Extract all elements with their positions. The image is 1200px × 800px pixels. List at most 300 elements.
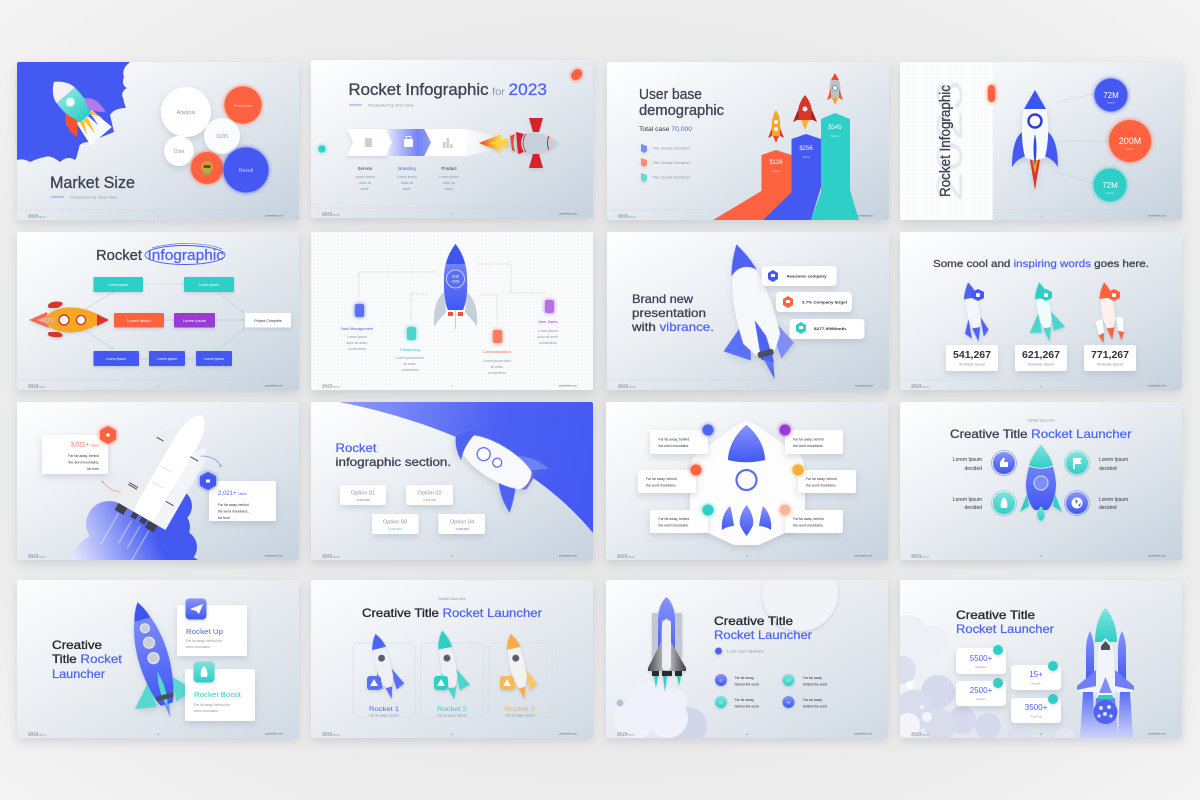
box: orange: Lorem Ipsum <box>127 318 151 323</box>
footer: 2023 <box>618 384 629 388</box>
subtitle: Subtitle Goes Here <box>439 597 466 601</box>
icon: blue rocket <box>107 594 199 726</box>
dashed connectors <box>359 264 546 324</box>
item: positioning <box>396 327 425 372</box>
chevron: service <box>347 129 392 156</box>
panel: shuttle slide <box>17 400 299 569</box>
bubble: result: Result <box>239 168 254 174</box>
legend <box>641 144 690 182</box>
icon: blue hex <box>200 472 216 490</box>
footer <box>617 554 872 558</box>
label: product <box>439 166 459 191</box>
panel: brand new presentation slide <box>607 232 889 390</box>
stat card three: Worldwide Spread <box>1097 362 1123 366</box>
box: blue two: Lorem Ipsum <box>157 357 177 361</box>
option: rocket 1: Rocket 1 <box>369 706 399 713</box>
card: rocket boost <box>185 669 255 721</box>
label: branding: Branding <box>398 166 416 171</box>
panel: inspiring words slide <box>900 232 1182 390</box>
stat: 72M blue <box>1094 78 1128 112</box>
stat card: fuel: Fuel Full <box>1030 714 1042 718</box>
feature: top left: decided <box>964 466 982 472</box>
feature: top left <box>953 450 1016 476</box>
footer: 2023 <box>618 214 629 218</box>
card: 3,021 users: the word mountains, <box>68 460 99 464</box>
item 04: 04 <box>787 700 790 704</box>
icon: goal rocket: Goal <box>452 274 459 278</box>
card: 2,021 users: 2,021+ Users <box>218 491 247 497</box>
card: option 04: 4,316,000 <box>455 527 469 531</box>
stat card: machine: 5500+ <box>970 654 993 663</box>
box: purple <box>174 313 215 328</box>
footer brand: 2023 <box>617 732 628 736</box>
item 02 <box>782 674 827 686</box>
panel: user base slide <box>607 62 889 220</box>
pill: orange <box>569 67 584 82</box>
heading <box>631 292 714 334</box>
box: teal top right <box>184 277 234 292</box>
feature: bottom left: Lorem Ipsum <box>953 497 982 503</box>
stat: 72M teal: Income <box>1106 192 1115 195</box>
label: product: Product <box>441 166 457 171</box>
bar: orange arrow: $126 <box>769 160 783 166</box>
item 01: behind the word <box>735 682 759 686</box>
heading: Title Rocket <box>52 652 123 666</box>
bar: orange arrow <box>713 150 792 220</box>
item 04: behind the word <box>803 704 827 708</box>
footer: yourwebsite.com <box>265 214 283 218</box>
label: service: Lorem ipsum <box>355 175 375 179</box>
card: option 03: 3,316,000 <box>388 527 402 531</box>
option: rocket 2 <box>421 627 483 718</box>
label: product: Lorem ipsum <box>439 175 459 179</box>
item 02: 02 <box>787 678 790 682</box>
icon: teal rocket <box>1021 279 1067 345</box>
item: task management: consectetur <box>348 347 367 351</box>
card: option 01: 3,316,000 <box>356 498 370 502</box>
heading: Rocket Launcher <box>714 628 812 642</box>
card: company target <box>776 292 852 312</box>
footer <box>311 208 577 216</box>
icon: white rocket <box>1012 90 1058 190</box>
label: service <box>355 166 375 191</box>
callout: middle left: the word mountains. <box>646 484 677 488</box>
box: blue one: Lorem Ipsum <box>106 357 126 361</box>
item: item sales: Item Sales <box>539 319 557 324</box>
footer: 2023 <box>617 554 628 558</box>
footer <box>322 732 577 736</box>
option: rocket 3 <box>489 630 552 718</box>
heading: Rocket <box>336 441 377 455</box>
icon: white rocket <box>437 417 549 518</box>
footer brand: vibrance <box>628 734 636 736</box>
card: rocket up: word mountains. <box>186 645 211 649</box>
feature: top left: Lorem Ipsum <box>953 457 982 463</box>
icon: plane tile <box>186 598 206 620</box>
heading: demographic <box>639 102 724 119</box>
label: product: dolor sit <box>443 181 455 185</box>
item: positioning: Lorem ipsum dolor <box>396 356 425 360</box>
footer <box>28 554 283 558</box>
stat: 72M blue: Income <box>1107 102 1116 104</box>
icon: goal rocket <box>434 244 477 329</box>
footer <box>900 380 1182 388</box>
panel: rocket infographic slide <box>311 60 593 218</box>
legend: The Great Decision <box>652 176 690 180</box>
card: option 04: Option 04 <box>450 520 474 526</box>
card: monthly value: $277,99/Month <box>814 327 846 331</box>
option: rocket 3: Far far away, behind <box>506 714 535 718</box>
item 03: behind the word <box>735 704 759 708</box>
heading: Rocket Launcher <box>956 622 1054 636</box>
callout: bottom left: Far far away, behind <box>658 517 689 521</box>
stat: 72M blue: 72M <box>1103 91 1119 100</box>
card: awesome company <box>762 266 837 286</box>
legend: The Great Decision <box>652 161 690 165</box>
heading year: 2023 <box>508 80 547 99</box>
heading: infographic section. <box>336 455 451 469</box>
stat card: rocket <box>956 678 1006 706</box>
stat card two <box>1015 345 1067 371</box>
footer: vibrance <box>628 216 637 218</box>
stat card: people <box>1011 661 1061 690</box>
card: option 01 <box>340 485 386 505</box>
launch clouds <box>888 615 1075 750</box>
heading suffix: for <box>492 87 506 98</box>
footer: yourwebsite.com <box>855 214 873 218</box>
footer: yourwebsite.com <box>559 554 577 558</box>
footer: vibrance <box>628 556 636 558</box>
footer: vibrance <box>332 386 341 388</box>
icon: red rocket <box>479 118 558 168</box>
footer: 2023 <box>322 732 333 736</box>
panel: flowchart slide <box>17 232 299 390</box>
footer: yourwebsite.com <box>265 384 283 388</box>
blue sky with clouds <box>17 62 130 162</box>
item 03: 03 <box>719 700 723 704</box>
callout: middle left: Far far away, behind <box>646 477 677 481</box>
feature: bottom right <box>1064 490 1128 516</box>
panel: launch pad slide <box>606 555 888 745</box>
footer: 10 <box>451 556 454 558</box>
item: communication: Lorem ipsum dolor <box>483 359 512 363</box>
pill: orange <box>988 85 995 102</box>
heading: Infographic <box>148 247 225 264</box>
icon: orange hex <box>100 426 116 444</box>
panel: rocket section slide <box>311 402 593 560</box>
feature: top right: Lorem Ipsum <box>1099 457 1128 463</box>
footer: 2023 <box>911 384 922 388</box>
label: service: amet. <box>361 187 369 191</box>
panel: three rockets slide <box>311 580 593 738</box>
item 03: Far far away, <box>735 698 754 702</box>
bar: teal arrow: Income <box>831 135 840 138</box>
item: communication <box>483 330 512 375</box>
item: communication: sit amet, <box>491 365 503 369</box>
item: positioning: Positioning <box>400 347 420 352</box>
callout: top right <box>780 424 843 454</box>
stat card one: 541,267 <box>953 350 991 361</box>
box: teal top left: Lorem Ipsum <box>108 283 128 287</box>
icon: blue rocket <box>956 280 990 344</box>
stat card three: 771,267 <box>1091 350 1129 361</box>
footer <box>1040 732 1166 736</box>
footer: 5 <box>157 386 159 388</box>
card: rocket up: Far far away, behind the <box>186 639 222 643</box>
bubble: date: 11/05 <box>216 134 228 140</box>
footer: 2023 <box>322 384 333 388</box>
stat card two: Worldwide Spread <box>1028 362 1054 366</box>
feature: bottom left: decided <box>964 505 982 511</box>
callout: bottom right <box>780 504 843 533</box>
stat card: rocket: 2500+ <box>970 686 993 695</box>
item: item sales: consectetur <box>539 341 558 345</box>
option: rocket 3: Rocket 3 <box>505 706 535 713</box>
stat card: machine <box>956 645 1006 674</box>
item: task management: dolor sit amet, <box>346 341 368 345</box>
option: rocket 2: Far far away, behind <box>438 714 467 718</box>
card: 3,021 users: far from <box>87 467 99 471</box>
card: 3,021 users <box>42 435 108 474</box>
icon: blue hex <box>972 289 984 301</box>
icon: goal rocket: 2023 <box>452 280 459 284</box>
card: option 03 <box>372 514 418 534</box>
card: option 02 <box>406 485 453 505</box>
legend: The Great Decision <box>652 146 690 150</box>
stat card: rocket: Rocket <box>976 697 986 701</box>
card: 2,021 users: Far far away, behind <box>218 503 249 507</box>
bubble: core: Core <box>174 149 185 155</box>
heading: Launcher <box>52 667 105 681</box>
chevron: branding <box>386 129 431 156</box>
panel: launcher stats slide <box>888 580 1182 750</box>
footer: yourwebsite.com <box>1148 214 1166 218</box>
feature: bottom left <box>953 490 1016 516</box>
footer: 2023 <box>28 214 39 218</box>
label: service: dolor sit <box>359 181 371 185</box>
callout: bottom right: Far far away, behind <box>793 517 824 521</box>
stat card one <box>946 345 998 371</box>
box: orange <box>114 313 164 328</box>
footer <box>322 554 577 558</box>
heading <box>96 244 225 264</box>
callout: top right: the word mountains. <box>793 444 824 448</box>
blue swoosh <box>339 402 593 533</box>
item: task management <box>341 304 374 351</box>
card: 3,021 users: Far far away, behind <box>68 454 99 458</box>
icon: space shuttle <box>93 400 224 569</box>
moon <box>762 555 838 631</box>
card: 3,021 users: 3,021+ Users <box>70 442 99 448</box>
footer: 2023 <box>322 212 333 216</box>
presenter line: Presented by Jhon Doe <box>70 196 117 200</box>
icon: central rocket <box>1020 445 1062 521</box>
item: task management: Lorem ipsum <box>347 335 367 339</box>
arrow: orange <box>102 481 121 492</box>
box: purple: Lorem Ipsum <box>183 318 207 323</box>
stat: 200M orange <box>1109 120 1151 162</box>
stat card: fuel <box>1011 694 1061 723</box>
footer: vibrance <box>628 386 637 388</box>
feature: bottom right: Lorem Ipsum <box>1099 497 1128 503</box>
arrow: blue <box>201 456 221 467</box>
footer: yourwebsite.com <box>1148 732 1166 736</box>
footer: 14 <box>451 734 454 736</box>
item 02: behind the word <box>803 682 827 686</box>
bar: orange arrow: Income <box>772 170 781 173</box>
footer <box>607 210 873 218</box>
stat card one: Worldwide Spread <box>959 362 985 366</box>
footer: 8 <box>1040 386 1042 388</box>
card: rocket boost: Rocket Boost <box>194 690 242 699</box>
chevron process <box>347 129 511 156</box>
box: blue three <box>196 351 232 366</box>
item 02: Far far away, <box>803 676 823 680</box>
box: blue three: Lorem Ipsum <box>204 357 224 361</box>
bar: blue arrow <box>763 134 821 220</box>
footer: 16 <box>1040 734 1043 736</box>
heading: Creative Title <box>956 608 1035 622</box>
arrows <box>1055 94 1107 183</box>
bar: blue arrow: Income <box>802 156 811 159</box>
footer <box>993 210 1182 218</box>
card: option 01: Option 01 <box>351 490 375 496</box>
footer: vibrance <box>922 386 930 388</box>
item: positioning: consectetur <box>401 368 420 372</box>
stat card: fuel: 3500+ <box>1025 703 1048 712</box>
heading <box>336 441 451 469</box>
footer: yourwebsite.com <box>1148 384 1166 388</box>
callout: bottom left: the word mountains. <box>658 524 689 528</box>
heading <box>714 614 812 642</box>
footer: vibrance <box>332 556 341 558</box>
footer <box>17 210 283 218</box>
footer: 6 <box>451 386 453 388</box>
heading <box>52 638 123 681</box>
footer: yourwebsite.com <box>1148 554 1166 558</box>
box: teal top left <box>94 277 143 292</box>
white rocket backdrop <box>690 421 805 545</box>
callout: top left: the word mountains. <box>658 444 689 448</box>
card: company target: 3.7% Company target <box>802 300 848 304</box>
feature: top right <box>1064 450 1128 476</box>
footer: 4 <box>1040 216 1042 218</box>
card: option 02: 4,316,000 <box>423 498 436 502</box>
item: item sales: dolor sit amet, <box>537 335 559 339</box>
blue launch cloud <box>69 489 198 564</box>
grid side panel <box>900 62 993 220</box>
card: option 02: Option 02 <box>417 490 442 496</box>
stat: 72M teal: 72M <box>1102 181 1118 190</box>
footer: vibrance <box>38 556 47 558</box>
footer: vibrance <box>332 214 341 216</box>
icon: teal hex <box>1040 289 1052 301</box>
footer: yourwebsite.com <box>559 732 577 736</box>
heading: Creative Title Rocket Launcher <box>950 427 1132 441</box>
stat: 200M orange: 200M <box>1119 136 1141 146</box>
footer: 2023 <box>911 554 922 558</box>
pill: teal <box>318 145 326 153</box>
faded year: 2023 <box>929 80 970 202</box>
icon: rocket window <box>736 470 756 490</box>
bubble: icon <box>191 152 223 184</box>
item 01: 01 <box>719 678 723 682</box>
icon: orange rocket <box>768 110 784 143</box>
footer: yourwebsite.com <box>559 212 577 216</box>
card: 2,021 users <box>209 481 276 521</box>
footer: 2023 <box>322 554 333 558</box>
icon: rocket flames <box>722 505 771 536</box>
option: rocket 2: Rocket 2 <box>437 706 467 713</box>
callout: top left <box>650 424 714 454</box>
item 01 <box>715 674 759 686</box>
item 04: Far far away, <box>803 698 823 702</box>
bar: blue arrow: $256 <box>799 146 813 152</box>
footer: yourwebsite.com <box>559 384 577 388</box>
stat card: people: 15+ <box>1029 670 1043 679</box>
item: positioning: sit amet, <box>404 362 416 366</box>
footer: yourwebsite.com <box>854 732 872 736</box>
stat card three <box>1084 345 1136 371</box>
icon: red rocket <box>793 95 817 130</box>
label: branding: amet. <box>403 187 411 191</box>
presenter line <box>51 196 117 200</box>
callout: top left: Far far away, behind <box>658 438 689 442</box>
feature: top right: decided <box>1099 466 1117 472</box>
heading <box>639 86 724 119</box>
presenter line: Presented by Jhon Doe <box>368 104 414 108</box>
panel: goal rocket slide <box>311 232 593 390</box>
option: rocket 1: Far far away, behind <box>370 714 399 718</box>
footer: 12 <box>1040 556 1043 558</box>
footer: vibrance <box>38 734 47 736</box>
heading: Brand new <box>632 292 693 306</box>
heading: Creative <box>52 638 102 652</box>
footer: yourwebsite.com <box>855 384 873 388</box>
item: item sales: Lorem ipsum <box>538 329 558 333</box>
label: branding: Lorem ipsum <box>397 175 417 179</box>
footer: yourwebsite.com <box>265 554 283 558</box>
box: teal top right: Lorem Ipsum <box>199 283 219 287</box>
card: option 03: Option 03 <box>383 520 407 526</box>
chevron: product <box>425 129 456 156</box>
panel: rocket split slide <box>900 62 1182 220</box>
heading: Creative Title <box>714 614 793 628</box>
item: item sales <box>537 300 559 345</box>
item 04 <box>782 696 827 708</box>
card: rocket boost: Far far away, behind the <box>194 703 230 707</box>
item 03 <box>715 696 759 708</box>
heading <box>956 608 1054 636</box>
option: rocket 1 <box>353 630 415 718</box>
heading: market size: Market Size <box>50 173 135 192</box>
card: monthly value <box>790 319 864 339</box>
bubble chart <box>161 86 268 192</box>
footer <box>28 732 283 736</box>
icon: big white rocket <box>698 237 802 390</box>
card: 2,021 users: far from <box>218 516 230 520</box>
footer: 2023 <box>28 732 39 736</box>
icon: teal rocket <box>52 82 112 145</box>
card: awesome company: Awesome company <box>786 274 826 278</box>
grid pattern <box>311 232 593 390</box>
tagline: Lets Get Started <box>727 650 764 654</box>
footer: vibrance <box>332 734 341 736</box>
box: blue one <box>94 351 139 366</box>
launch clouds <box>614 681 707 745</box>
exhaust trail <box>466 129 495 156</box>
item 01: Far far away, <box>735 676 754 680</box>
